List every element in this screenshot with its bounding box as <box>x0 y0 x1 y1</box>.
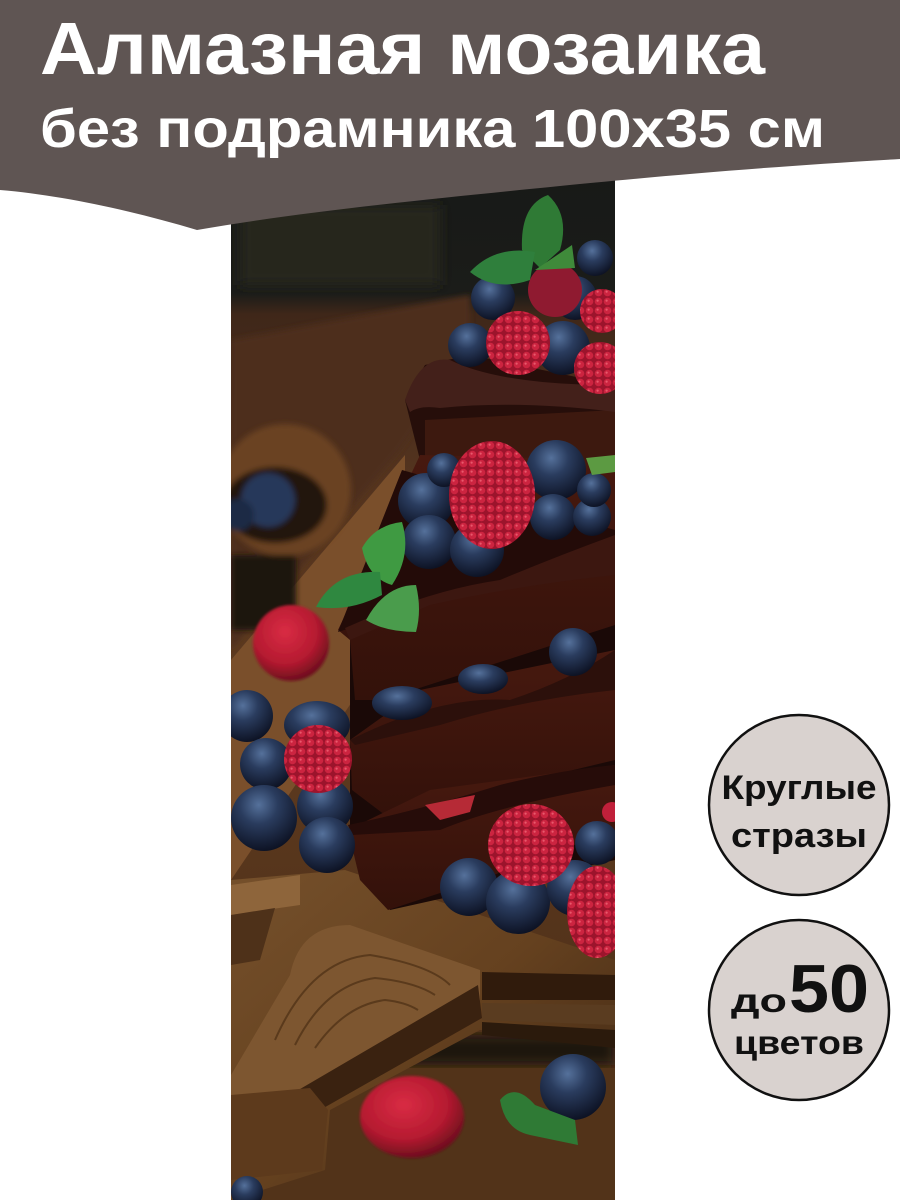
raspberries <box>253 263 627 1158</box>
badge: round rhinestones: стразы <box>731 817 867 855</box>
blurred tart at left <box>219 424 351 630</box>
shadow behind the stack <box>350 600 615 910</box>
title: Алмазная мозаика <box>40 7 766 90</box>
header banner <box>0 0 900 230</box>
photo background: table and dark backdrop <box>231 170 615 1200</box>
blueberries <box>221 240 619 1200</box>
badge: round rhinestones: Круглые <box>722 769 876 807</box>
middle brownie slice <box>350 650 615 815</box>
top brownie slice <box>338 455 615 700</box>
badge: up to 50 colours: цветов <box>734 1024 864 1061</box>
badge: round rhinestones <box>709 715 889 895</box>
mint leaves <box>316 195 615 1145</box>
photo: brownie stack with berries <box>219 170 627 1200</box>
badge: up to 50 colours <box>709 920 889 1100</box>
wooden cutting board <box>231 870 615 1200</box>
bottom brownie slice <box>348 765 615 910</box>
subtitle: без подрамника 100х35 см <box>40 99 825 159</box>
back brownie slice <box>405 358 615 460</box>
badge: up to 50 colours: до <box>731 982 787 1019</box>
badge: up to 50 colours: 50 <box>789 951 869 1027</box>
